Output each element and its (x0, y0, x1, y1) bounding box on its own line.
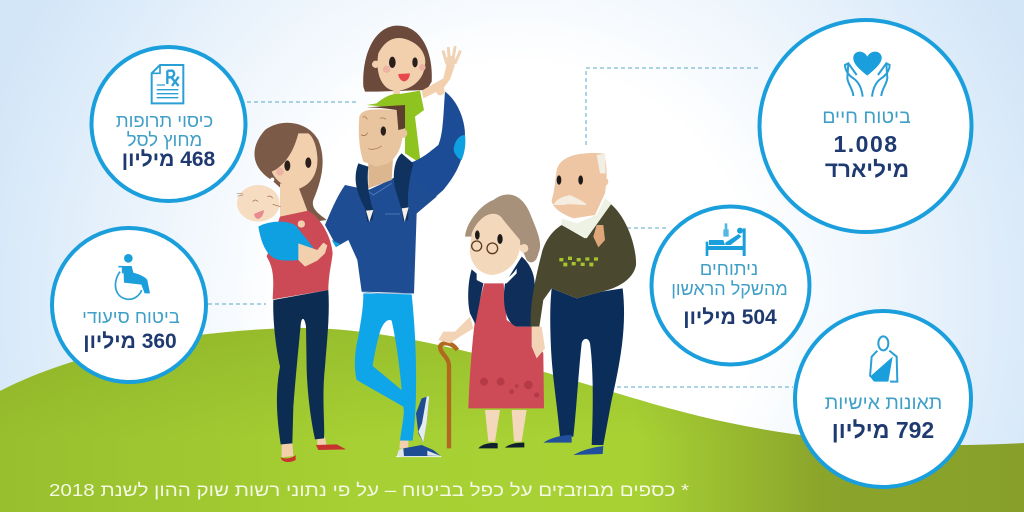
label: surgeries: מהשקל הראשון (671, 279, 788, 299)
value: 1.008 billion: 1.008 (833, 131, 899, 157)
value: 468 million: 468 מיליון (122, 148, 216, 171)
label: personal accidents: תאונות אישיות (825, 392, 942, 414)
label: surgeries: ניתוחים (700, 258, 758, 279)
dashed connector lines (208, 68, 793, 387)
icon: prescription (152, 65, 183, 103)
panel: surgeries (652, 206, 810, 364)
icon: hospital bed (706, 223, 746, 256)
panel: personal accidents (795, 311, 971, 487)
value: 360 million: 360 מיליון (83, 330, 177, 353)
value: 792 million: 792 מיליון (832, 417, 934, 443)
figure: grandmother (438, 195, 544, 448)
panel: drug coverage (92, 47, 246, 201)
panel: life insurance (760, 20, 972, 232)
value: 504 million: 504 מיליון (683, 306, 777, 329)
green hill (0, 328, 1024, 512)
figure: grandfather (531, 153, 636, 455)
value: 1.008 billion: מיליארד (825, 157, 909, 182)
figure: girl on shoulders and father's upper body (325, 26, 465, 294)
label: nursing insurance: ביטוח סיעודי (82, 306, 180, 327)
label: surgeries (671, 258, 788, 299)
figure: legs of mother and father, shoes (273, 290, 457, 462)
value: 1.008 billion (825, 131, 909, 182)
panel: nursing insurance (52, 228, 206, 382)
illustration: family (237, 26, 636, 462)
label: life insurance: ביטוח חיים (822, 106, 911, 128)
icon: arm sling (870, 336, 897, 382)
icon: heart in hands (845, 52, 890, 97)
icon: wheelchair (115, 254, 150, 299)
footnote: * כספים מבוזבזים על כפל בביטוח – על פי נתוני רשות שוק ההון לשנת 2018 (49, 480, 689, 500)
figure: mother and baby (237, 123, 333, 299)
label: drug coverage: כיסוי תרופות (116, 110, 213, 131)
panel: drug coverage: מחוץ לסל (127, 129, 202, 150)
